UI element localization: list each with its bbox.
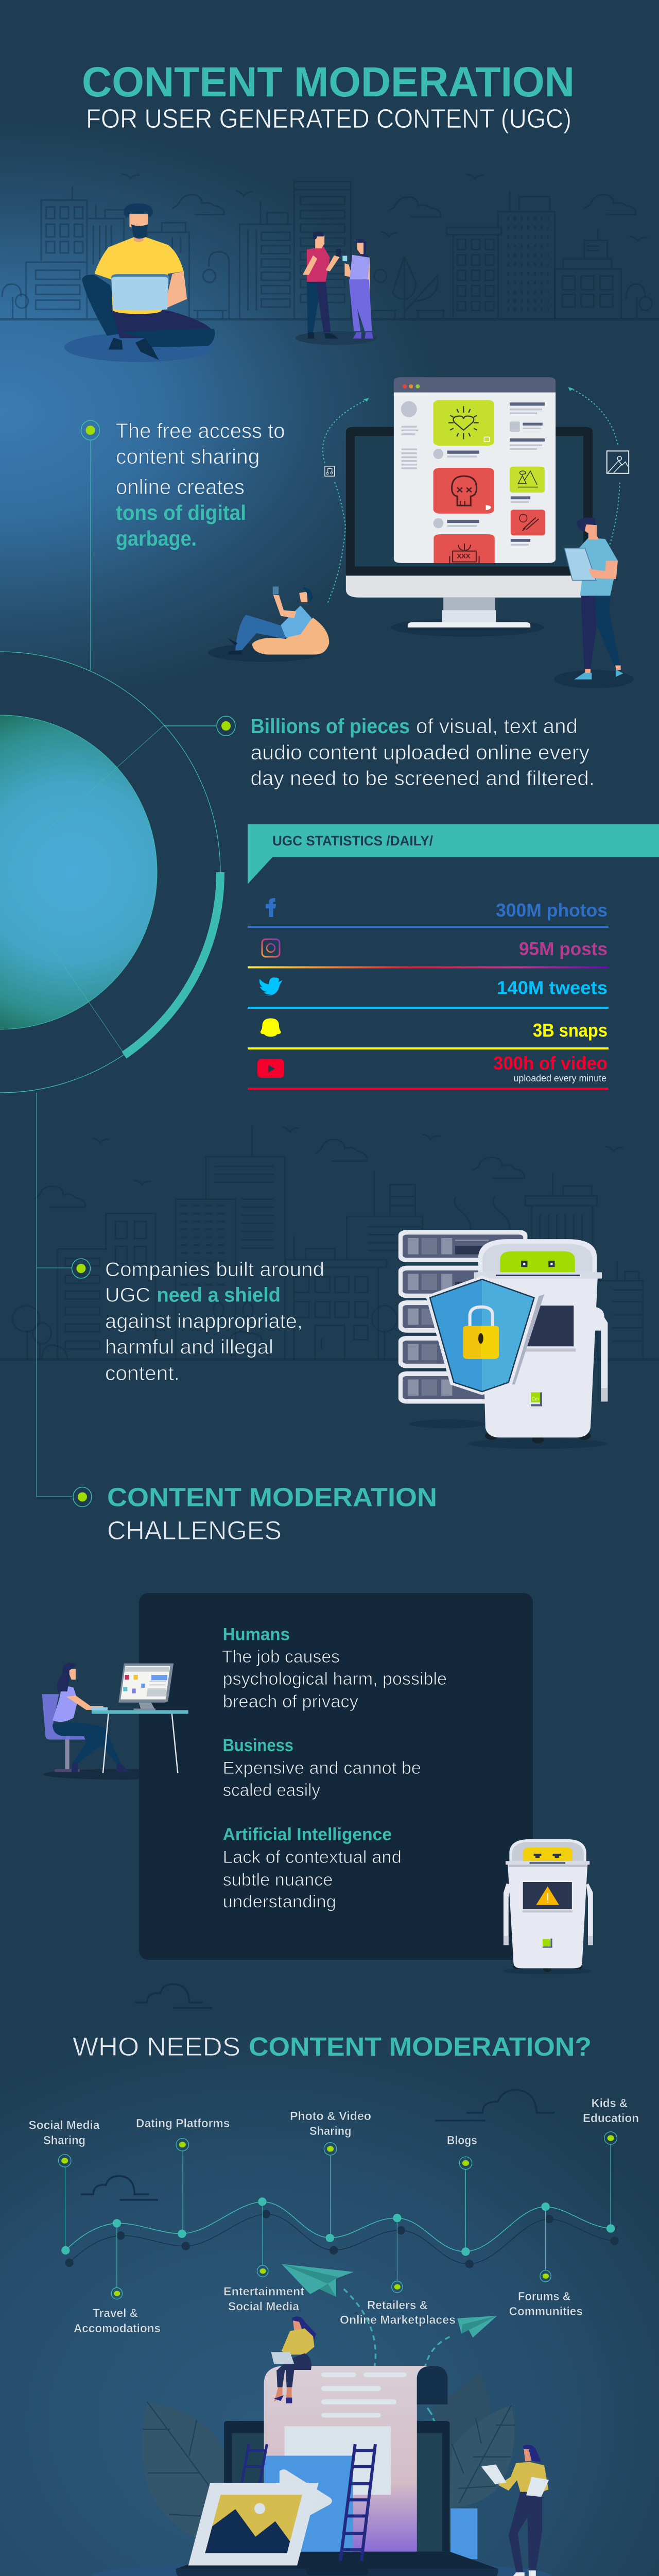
row: facebook: 300M photos — [496, 900, 608, 921]
illustration: server rack — [398, 1230, 527, 1428]
labels: who needs categories: Education — [583, 2111, 639, 2125]
ground shadow — [92, 2561, 551, 2576]
browser window — [394, 377, 556, 563]
row: instagram — [248, 938, 609, 969]
labels: who needs categories: Social Media — [29, 2119, 100, 2132]
timeline wave chart — [58, 2132, 619, 2299]
illustration: paper planes — [282, 2264, 497, 2370]
text: free access: The free access to — [115, 419, 285, 443]
text: companies need a shield: Companies built around — [105, 1259, 324, 1281]
title: FOR USER GENERATED CONTENT (UGC) — [86, 104, 571, 134]
background skyline: middle — [0, 1126, 659, 1360]
challenge: humans: breach of privacy — [223, 1692, 358, 1711]
row: youtube: 300h of video — [493, 1053, 608, 1074]
laptop — [176, 2421, 499, 2576]
clouds around who needs — [81, 1984, 555, 2200]
labels: who needs categories: Kids & — [592, 2096, 628, 2110]
row: twitter: 140M tweets — [497, 977, 608, 998]
text: billions of pieces: day need to be screened and filtered. — [250, 767, 595, 790]
text: free access: garbage. — [116, 527, 197, 550]
heading: who needs content moderation: WHO NEEDS — [73, 2032, 240, 2061]
heading: who needs content moderation — [73, 2032, 592, 2061]
challenge: artificial intelligence: Lack of contextual and — [223, 1848, 402, 1867]
panel: challenges — [139, 1593, 533, 1960]
challenge: artificial intelligence: Artificial Intelligence — [223, 1825, 392, 1844]
text: billions of pieces: of visual, text and — [416, 715, 578, 738]
wave shadow — [65, 2210, 619, 2268]
timeline connector: top — [81, 420, 100, 671]
labels: who needs categories: Travel & — [93, 2306, 138, 2319]
leaves — [143, 2374, 515, 2545]
title — [82, 59, 575, 134]
statistics banner: UGC STATISTICS /DAILY/ — [272, 833, 433, 849]
illustration: person on bean bag — [208, 586, 329, 662]
labels: who needs categories: Accomodations — [74, 2321, 161, 2335]
text: billions of pieces: Billions of pieces — [250, 715, 410, 738]
woman standing with papers — [481, 2445, 549, 2576]
illustration: moderator at desk — [42, 1663, 195, 1780]
labels: who needs categories: Forums & — [518, 2290, 571, 2303]
ladder front — [340, 2444, 375, 2561]
dashed arrows and media icons — [323, 387, 629, 603]
text: companies need a shield: UGC — [105, 1284, 150, 1307]
icon: picture — [607, 451, 629, 473]
challenge: humans: The job causes — [222, 1647, 340, 1667]
statistics banner — [248, 824, 659, 884]
labels: who needs categories — [29, 2096, 639, 2335]
heading: content moderation challenges: CONTENT MODERATION — [107, 1483, 437, 1512]
labels: who needs categories: Photo & Video — [290, 2109, 371, 2123]
text: companies need a shield — [105, 1259, 324, 1385]
icon: music — [325, 466, 335, 476]
text: Cm: Cm — [532, 1396, 539, 1402]
globe graphic — [0, 652, 220, 1093]
challenge: artificial intelligence — [223, 1825, 402, 1911]
background skyline: top — [0, 174, 659, 319]
text: companies need a shield: harmful and illegal — [105, 1336, 273, 1358]
connector and marker: shield — [37, 1093, 91, 1497]
illustration: man holding tablet — [554, 518, 634, 688]
illustration: monitor with feed — [346, 377, 593, 637]
challenge: artificial intelligence: subtle nuance — [223, 1870, 333, 1890]
row: snapchat: 3B snaps — [533, 1020, 608, 1041]
paper scroll — [264, 2366, 447, 2552]
row: instagram: 95M posts — [519, 938, 608, 959]
text: free access: online creates — [116, 475, 245, 499]
row: snapchat — [248, 1019, 609, 1049]
illustration: couple with phones — [296, 231, 377, 345]
text: companies need a shield: against inappropriate, — [105, 1311, 303, 1332]
illustration: robot with warning — [504, 1839, 593, 1975]
challenge: artificial intelligence: understanding — [223, 1892, 336, 1911]
row: youtube: uploaded every minute — [514, 1073, 606, 1083]
connector and marker: billions — [164, 716, 235, 736]
picture card — [188, 2483, 319, 2565]
illustration: woman sitting on paper — [271, 2316, 316, 2403]
heading: content moderation challenges: CHALLENGES — [107, 1516, 282, 1545]
text: companies need a shield: content. — [105, 1362, 180, 1385]
illustration: man sitting with laptop — [64, 204, 215, 362]
heading: who needs content moderation: CONTENT MODERATION? — [249, 2032, 592, 2061]
challenge: humans: psychological harm, possible — [223, 1669, 447, 1689]
text: XXX: XXX — [457, 552, 470, 560]
text: billions of pieces: audio content uploaded online every — [250, 741, 589, 764]
row: youtube — [248, 1053, 609, 1090]
ladder back — [241, 2444, 267, 2484]
heading: content moderation challenges — [107, 1483, 437, 1545]
text: free access: tons of digital — [116, 501, 246, 524]
title: CONTENT MODERATION — [82, 59, 575, 106]
labels: who needs categories: Sharing — [309, 2124, 351, 2138]
play arrow — [280, 2469, 332, 2515]
challenge: humans — [222, 1625, 447, 1711]
text: billions of pieces — [250, 715, 595, 790]
challenge: business — [223, 1736, 421, 1800]
text: companies need a shield: need a shield — [157, 1284, 281, 1307]
labels: who needs categories: Social Media — [228, 2300, 299, 2313]
labels: who needs categories: Communities — [509, 2304, 583, 2318]
text: free access: content sharing — [116, 445, 259, 468]
row: facebook — [248, 898, 609, 928]
text: free access — [115, 419, 285, 550]
challenge: business: Business — [223, 1736, 293, 1755]
challenge: business: scaled easily — [223, 1781, 320, 1800]
row: twitter — [248, 977, 609, 1009]
labels: who needs categories: Entertainment — [223, 2285, 304, 2298]
labels: who needs categories: Online Marketplaces — [340, 2313, 456, 2327]
panel: UGC statistics — [248, 824, 659, 1090]
marker: challenges — [73, 1487, 92, 1506]
illustration: robot with shield — [428, 1239, 608, 1449]
challenge: business: Expensive and cannot be — [223, 1758, 421, 1778]
icon: shield with padlock — [428, 1278, 544, 1393]
labels: who needs categories: Dating Platforms — [136, 2116, 230, 2130]
labels: who needs categories: Retailers & — [367, 2298, 428, 2312]
labels: who needs categories: Sharing — [43, 2133, 85, 2147]
challenge: humans: Humans — [223, 1625, 290, 1645]
labels: who needs categories: Blogs — [447, 2133, 477, 2147]
illustration: laptop with scroll, photo and people — [92, 2366, 551, 2576]
